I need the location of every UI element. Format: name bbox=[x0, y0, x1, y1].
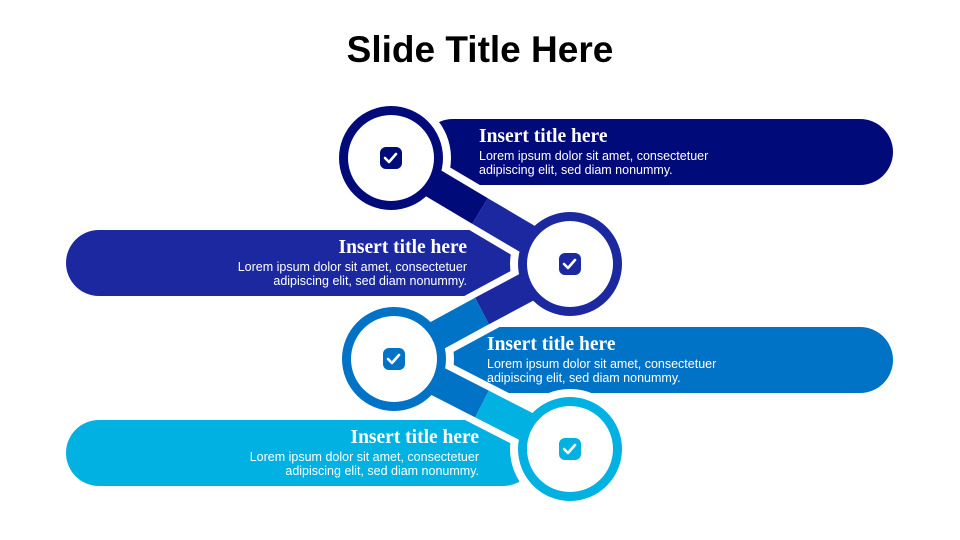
text 3: Insert title here bbox=[487, 334, 616, 355]
text 3: Lorem ipsum dolor sit amet, consectetuer bbox=[487, 357, 716, 371]
text 1: adipiscing elit, sed diam nonummy. bbox=[479, 163, 673, 177]
bar 2 bbox=[66, 230, 526, 296]
text 2 bbox=[238, 237, 467, 288]
circle 4 bbox=[518, 397, 622, 501]
bar 3 bbox=[430, 327, 893, 393]
text 4: Insert title here bbox=[350, 427, 479, 448]
text 4: adipiscing elit, sed diam nonummy. bbox=[285, 464, 479, 478]
bar 4 bbox=[66, 420, 536, 486]
text 1 bbox=[479, 126, 708, 177]
text 4: Lorem ipsum dolor sit amet, consectetuer bbox=[250, 450, 479, 464]
text 2: Insert title here bbox=[338, 237, 467, 258]
text 4 bbox=[250, 427, 479, 478]
text 3: adipiscing elit, sed diam nonummy. bbox=[487, 371, 681, 385]
text 2: adipiscing elit, sed diam nonummy. bbox=[273, 274, 467, 288]
bar 1 bbox=[420, 119, 893, 185]
text 1: Insert title here bbox=[479, 126, 608, 147]
text 2: Lorem ipsum dolor sit amet, consectetuer bbox=[238, 260, 467, 274]
circle 1 bbox=[339, 106, 443, 210]
text 3 bbox=[487, 334, 716, 385]
circle 2 bbox=[518, 212, 622, 316]
text 1: Lorem ipsum dolor sit amet, consectetuer bbox=[479, 149, 708, 163]
connectors bbox=[391, 158, 570, 449]
title: Slide Title Here bbox=[347, 29, 613, 70]
circle 3 bbox=[342, 307, 446, 411]
